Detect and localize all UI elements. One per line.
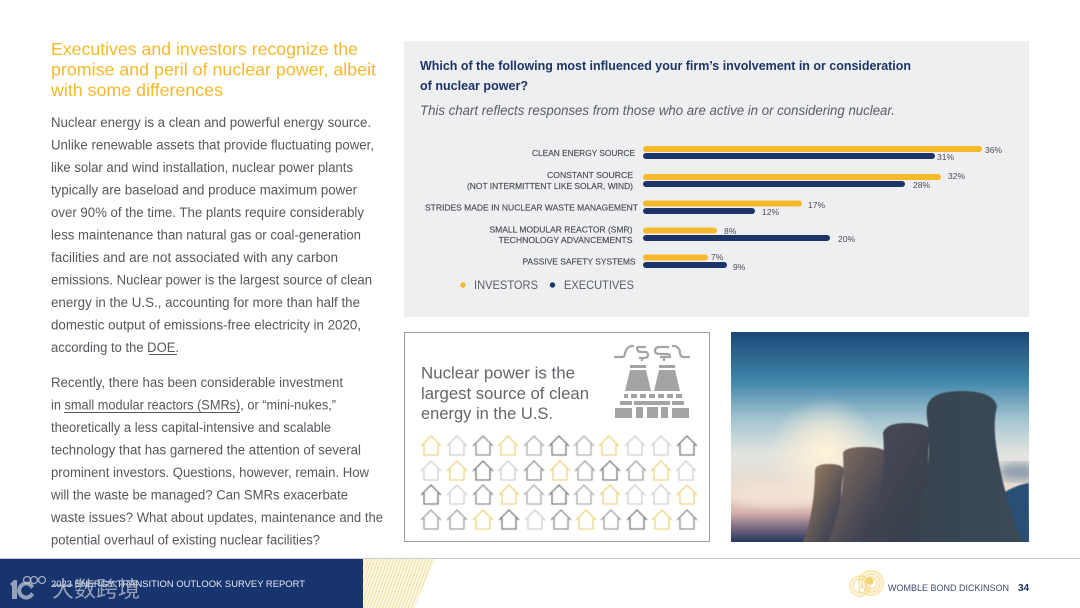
text block: nuclear energy overview: according to the DOE. [51, 340, 179, 355]
text block: small modular reactors: in small modular reactors (SMRs), or “mini-nukes,” [51, 398, 336, 412]
text block: nuclear energy overview: Nuclear energy is a clean and powerful energy source. [51, 115, 371, 130]
watermark [10, 576, 140, 602]
text block: nuclear energy overview: Unlike renewable assets that provide fluctuating power, [51, 138, 374, 152]
callout text: largest source of clean [421, 384, 589, 403]
text block: nuclear energy overview: over 90% of the time. The plants require considerably [51, 205, 364, 220]
value labels: 28% [913, 180, 930, 190]
legend: INVESTORS [474, 278, 538, 292]
text block: nuclear energy overview: typically are baseload and produce maximum power [51, 182, 357, 198]
bar chart [425, 145, 1002, 272]
text block: nuclear energy overview: facilities and are not associated with any carbon [51, 250, 338, 265]
chart question: Which of the following most influenced your firm’s involvement in or consideration [420, 58, 911, 73]
panel: survey chart [404, 41, 1029, 317]
text block: small modular reactors: waste issues? What about updates, maintenance and the [50, 510, 383, 525]
category labels: (NOT INTERMITTENT LIKE SOLAR, WIND) [467, 182, 633, 191]
chart question: of nuclear power? [420, 78, 528, 93]
text block: nuclear energy overview: less maintenance than natural gas or coal-generation [51, 228, 361, 242]
value labels [711, 145, 1002, 272]
category labels: CLEAN ENERGY SOURCE [532, 149, 636, 158]
text block: small modular reactors: theoretically a less capital-intensive and scalable [51, 420, 331, 435]
heading: Executives and investors recognize the [51, 39, 358, 59]
heading: promise and peril of nuclear power, albeit [51, 60, 376, 80]
text block: small modular reactors: Recently, there has been considerable investment [51, 375, 343, 390]
photo: cooling towers at sunrise [725, 332, 1038, 542]
legend: EXECUTIVES [564, 278, 634, 292]
panel: clean energy callout [404, 332, 710, 542]
text block: small modular reactors: will the waste be managed? Can SMRs exacerbate [50, 488, 348, 502]
callout text: energy in the U.S. [421, 404, 553, 423]
value labels: 8% [724, 226, 737, 236]
value labels: 12% [762, 207, 779, 217]
text block: nuclear energy overview: domestic output of emissions-free electricity in 2020, [51, 318, 361, 332]
text block: nuclear energy overview: like solar and wind installation, nuclear power plants [51, 160, 353, 175]
text block: small modular reactors: potential overhaul of existing nuclear facilities? [51, 532, 320, 548]
value labels: 9% [733, 262, 746, 272]
category labels: TECHNOLOGY ADVANCEMENTS [498, 236, 633, 245]
category labels [425, 149, 638, 266]
footer report title: 2023 ENERGY TRANSITION OUTLOOK SURVEY REPORT [51, 579, 305, 590]
text block: nuclear energy overview: emissions. Nuclear power is the largest source of clean [51, 272, 372, 288]
chart subtitle: This chart reflects responses from those who are active in or considering nuclear. [420, 103, 895, 118]
value labels: 36% [985, 145, 1002, 155]
text block: nuclear energy overview: energy in the U.S., accounting for more than half the [51, 295, 360, 310]
text block: small modular reactors: prominent investors. Questions, however, remain. How [51, 465, 369, 480]
bars: executives [643, 153, 935, 268]
heading: with some differences [50, 80, 223, 100]
value labels: 17% [808, 200, 825, 210]
footer band [0, 559, 363, 608]
chart question [420, 58, 911, 93]
legend [460, 278, 634, 292]
category labels: CONSTANT SOURCE [547, 171, 634, 180]
page number: 34 [1018, 583, 1030, 594]
callout text: Nuclear power is the [421, 364, 575, 382]
logo: Womble Bond Dickinson mark [850, 571, 883, 596]
firm name: WOMBLE BOND DICKINSON [888, 583, 1009, 594]
footer hatch accent [363, 559, 435, 608]
heading [50, 39, 376, 100]
value labels: 20% [838, 234, 855, 244]
value labels: 32% [948, 171, 965, 181]
watermark: 大数跨境 [52, 577, 140, 602]
text block: small modular reactors: technology that has garnered the attention of several [51, 442, 361, 458]
icon grid: houses [421, 436, 697, 529]
category labels: SMALL MODULAR REACTOR (SMR) [490, 226, 633, 234]
bars: investors [643, 146, 982, 260]
icon: nuclear power plant [614, 346, 690, 418]
value labels: 7% [711, 252, 724, 262]
text block: small modular reactors [50, 375, 383, 548]
category labels: STRIDES MADE IN NUCLEAR WASTE MANAGEMENT [425, 204, 638, 212]
text block: nuclear energy overview [51, 115, 374, 355]
footer [0, 558, 1080, 608]
callout text [421, 364, 589, 423]
value labels: 31% [937, 152, 954, 162]
category labels: PASSIVE SAFETY SYSTEMS [522, 258, 636, 266]
